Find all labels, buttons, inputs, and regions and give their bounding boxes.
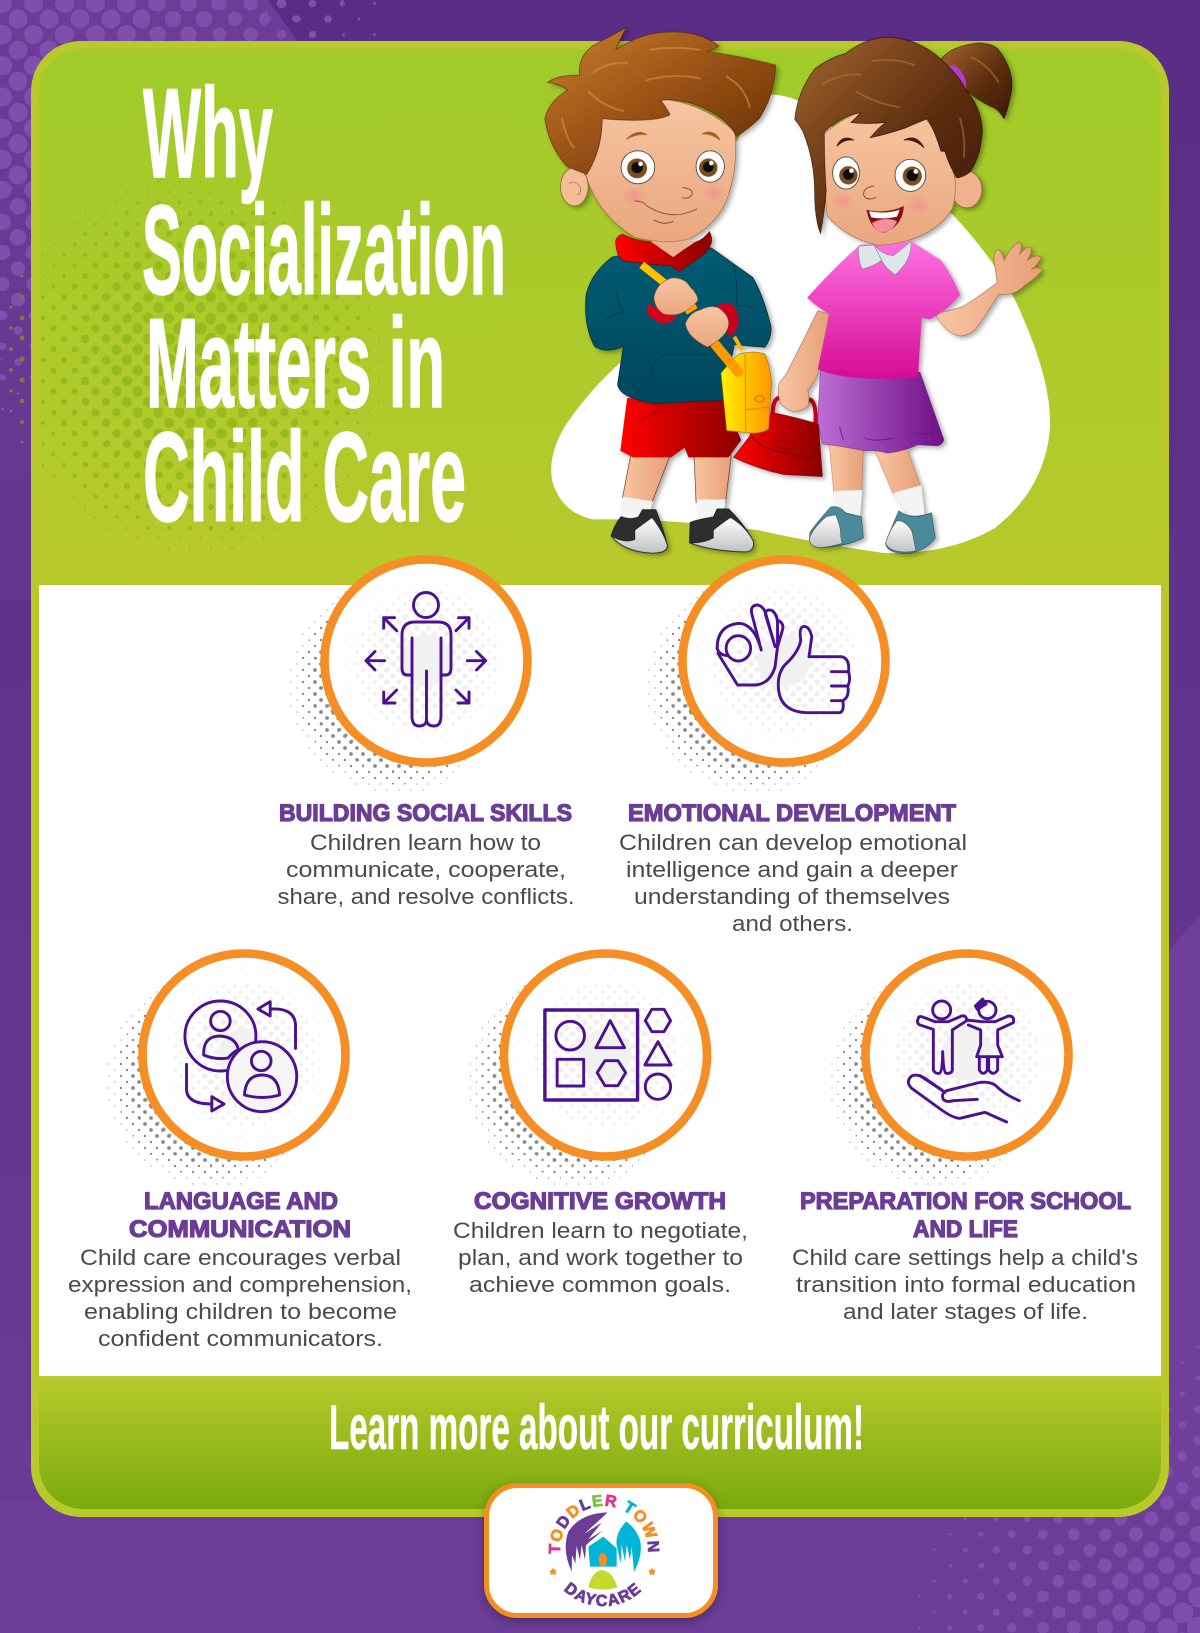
girl collar bbox=[858, 241, 911, 275]
girl face bbox=[824, 113, 955, 245]
white blob bbox=[551, 94, 1050, 553]
logo wordmark: DAYCARE bbox=[564, 1582, 642, 1606]
description bbox=[792, 1245, 1138, 1324]
title: Matters in bbox=[146, 292, 445, 434]
boy hoodie bbox=[586, 248, 771, 404]
girl waving arm bbox=[935, 242, 1043, 336]
heading bbox=[800, 1188, 1131, 1243]
description: transition into formal education bbox=[796, 1272, 1136, 1297]
panel: building social skills bbox=[278, 560, 574, 909]
heading: COGNITIVE GROWTH bbox=[474, 1188, 726, 1215]
description: understanding of themselves bbox=[634, 884, 950, 909]
girl legs bbox=[829, 444, 925, 517]
description: and later stages of life. bbox=[843, 1299, 1088, 1324]
panel: hero bbox=[5, 49, 1161, 585]
logo wordmark: * bbox=[550, 1566, 556, 1583]
icon badge: ok hand and thumbs up bbox=[646, 560, 886, 794]
boy hair strands bbox=[562, 48, 750, 147]
panel: emotional development bbox=[619, 560, 967, 936]
boy scarf bbox=[616, 232, 712, 272]
logo artwork bbox=[566, 1512, 641, 1589]
girl hair bbox=[795, 37, 982, 233]
description: enabling children to become bbox=[84, 1299, 397, 1324]
boy eyes bbox=[621, 151, 724, 184]
text: Socialization bbox=[142, 179, 506, 321]
olive dots on left strip bbox=[1, 274, 25, 443]
boy hair bbox=[545, 28, 776, 174]
panel: preparation for school and life bbox=[792, 954, 1138, 1324]
icon badge: person with arrows bbox=[288, 560, 528, 794]
icon: conversation bbox=[185, 1001, 297, 1112]
girl eyes bbox=[833, 157, 926, 191]
description: confident communicators. bbox=[98, 1326, 383, 1351]
boy brows and mouth bbox=[626, 132, 720, 223]
description: communicate, cooperate, bbox=[286, 857, 566, 882]
icon: children and hand bbox=[908, 999, 1019, 1122]
heading: BUILDING SOCIAL SKILLS bbox=[279, 800, 572, 827]
description: achieve common goals. bbox=[469, 1272, 731, 1297]
description: Children learn to negotiate, bbox=[453, 1218, 748, 1243]
halftone: bottom-right bbox=[910, 1340, 1200, 1633]
illustration: boy bbox=[545, 28, 822, 553]
hoodie folds bbox=[605, 264, 753, 393]
illustration: girl bbox=[778, 37, 1043, 554]
boy hands bbox=[654, 278, 729, 347]
icon badge: children on hand bbox=[829, 954, 1068, 1188]
description: expression and comprehension, bbox=[68, 1272, 412, 1297]
green dome bbox=[588, 1570, 617, 1589]
description: Children can develop emotional bbox=[619, 830, 967, 855]
girl holding arm bbox=[778, 311, 829, 411]
girl ear bbox=[951, 171, 982, 208]
heading: AND LIFE bbox=[913, 1216, 1018, 1243]
description: Children learn how to bbox=[310, 830, 541, 855]
logo wordmark: TODDLER TOW N bbox=[548, 1494, 660, 1554]
boy ear bbox=[561, 168, 588, 206]
boy cheeks bbox=[622, 183, 726, 207]
hair tie bbox=[943, 62, 970, 95]
girl cheeks bbox=[831, 191, 931, 215]
halftone: top-left bbox=[0, 0, 381, 413]
teal hand bbox=[616, 1522, 641, 1572]
panel: white content bbox=[39, 585, 1161, 1376]
panel: call to action bbox=[39, 1376, 1161, 1509]
purple hand bbox=[566, 1512, 607, 1572]
girl shirt bbox=[807, 241, 960, 379]
icon: shape sorter bbox=[545, 1009, 671, 1100]
heading: PREPARATION FOR SCHOOL bbox=[800, 1188, 1131, 1215]
description bbox=[68, 1245, 412, 1351]
ponytail bbox=[941, 43, 1012, 119]
logo wordmark: * bbox=[649, 1566, 655, 1583]
description bbox=[619, 830, 967, 936]
panel: language and communication bbox=[68, 954, 412, 1351]
girl brows and nose bbox=[837, 138, 924, 199]
strap bbox=[642, 265, 742, 350]
girl skirt bbox=[818, 370, 944, 453]
yellow bag bbox=[721, 352, 771, 433]
description: share, and resolve conflicts. bbox=[278, 884, 574, 909]
title bbox=[142, 62, 506, 548]
description: Child care settings help a child's bbox=[792, 1245, 1138, 1270]
boy legs bbox=[619, 453, 731, 520]
title: Why bbox=[143, 62, 273, 204]
heading: LANGUAGE AND bbox=[144, 1188, 338, 1215]
description: plan, and work together to bbox=[458, 1245, 743, 1270]
logo wordmark bbox=[548, 1494, 660, 1606]
girl hair strands bbox=[822, 57, 998, 157]
heading bbox=[129, 1188, 351, 1243]
logo badge bbox=[479, 1481, 723, 1626]
boy cuffs bbox=[647, 303, 739, 338]
boy face bbox=[585, 99, 736, 242]
icon badge: two people exchanging bbox=[106, 954, 346, 1188]
boy shorts bbox=[620, 398, 741, 457]
description: and others. bbox=[732, 911, 853, 936]
description: Child care encourages verbal bbox=[80, 1245, 401, 1270]
house bbox=[588, 1537, 617, 1567]
boy shoes bbox=[611, 509, 754, 553]
description: intelligence and gain a deeper bbox=[626, 857, 959, 882]
description bbox=[453, 1218, 748, 1297]
icon badge: shapes bbox=[468, 954, 707, 1188]
description bbox=[278, 830, 574, 909]
hero halftone bbox=[41, 180, 380, 550]
door bbox=[598, 1552, 607, 1566]
girl shoes bbox=[809, 507, 935, 554]
red handbag bbox=[734, 397, 822, 476]
heading: COMMUNICATION bbox=[129, 1216, 351, 1243]
lower strap bbox=[715, 344, 738, 372]
icon: person bbox=[366, 592, 486, 726]
girl mouth bbox=[866, 206, 904, 233]
boy neck bbox=[650, 241, 696, 257]
icon: hands bbox=[717, 605, 850, 713]
title: Child Care bbox=[143, 406, 466, 548]
panel: cognitive growth bbox=[453, 954, 748, 1297]
heading: EMOTIONAL DEVELOPMENT bbox=[628, 800, 956, 827]
